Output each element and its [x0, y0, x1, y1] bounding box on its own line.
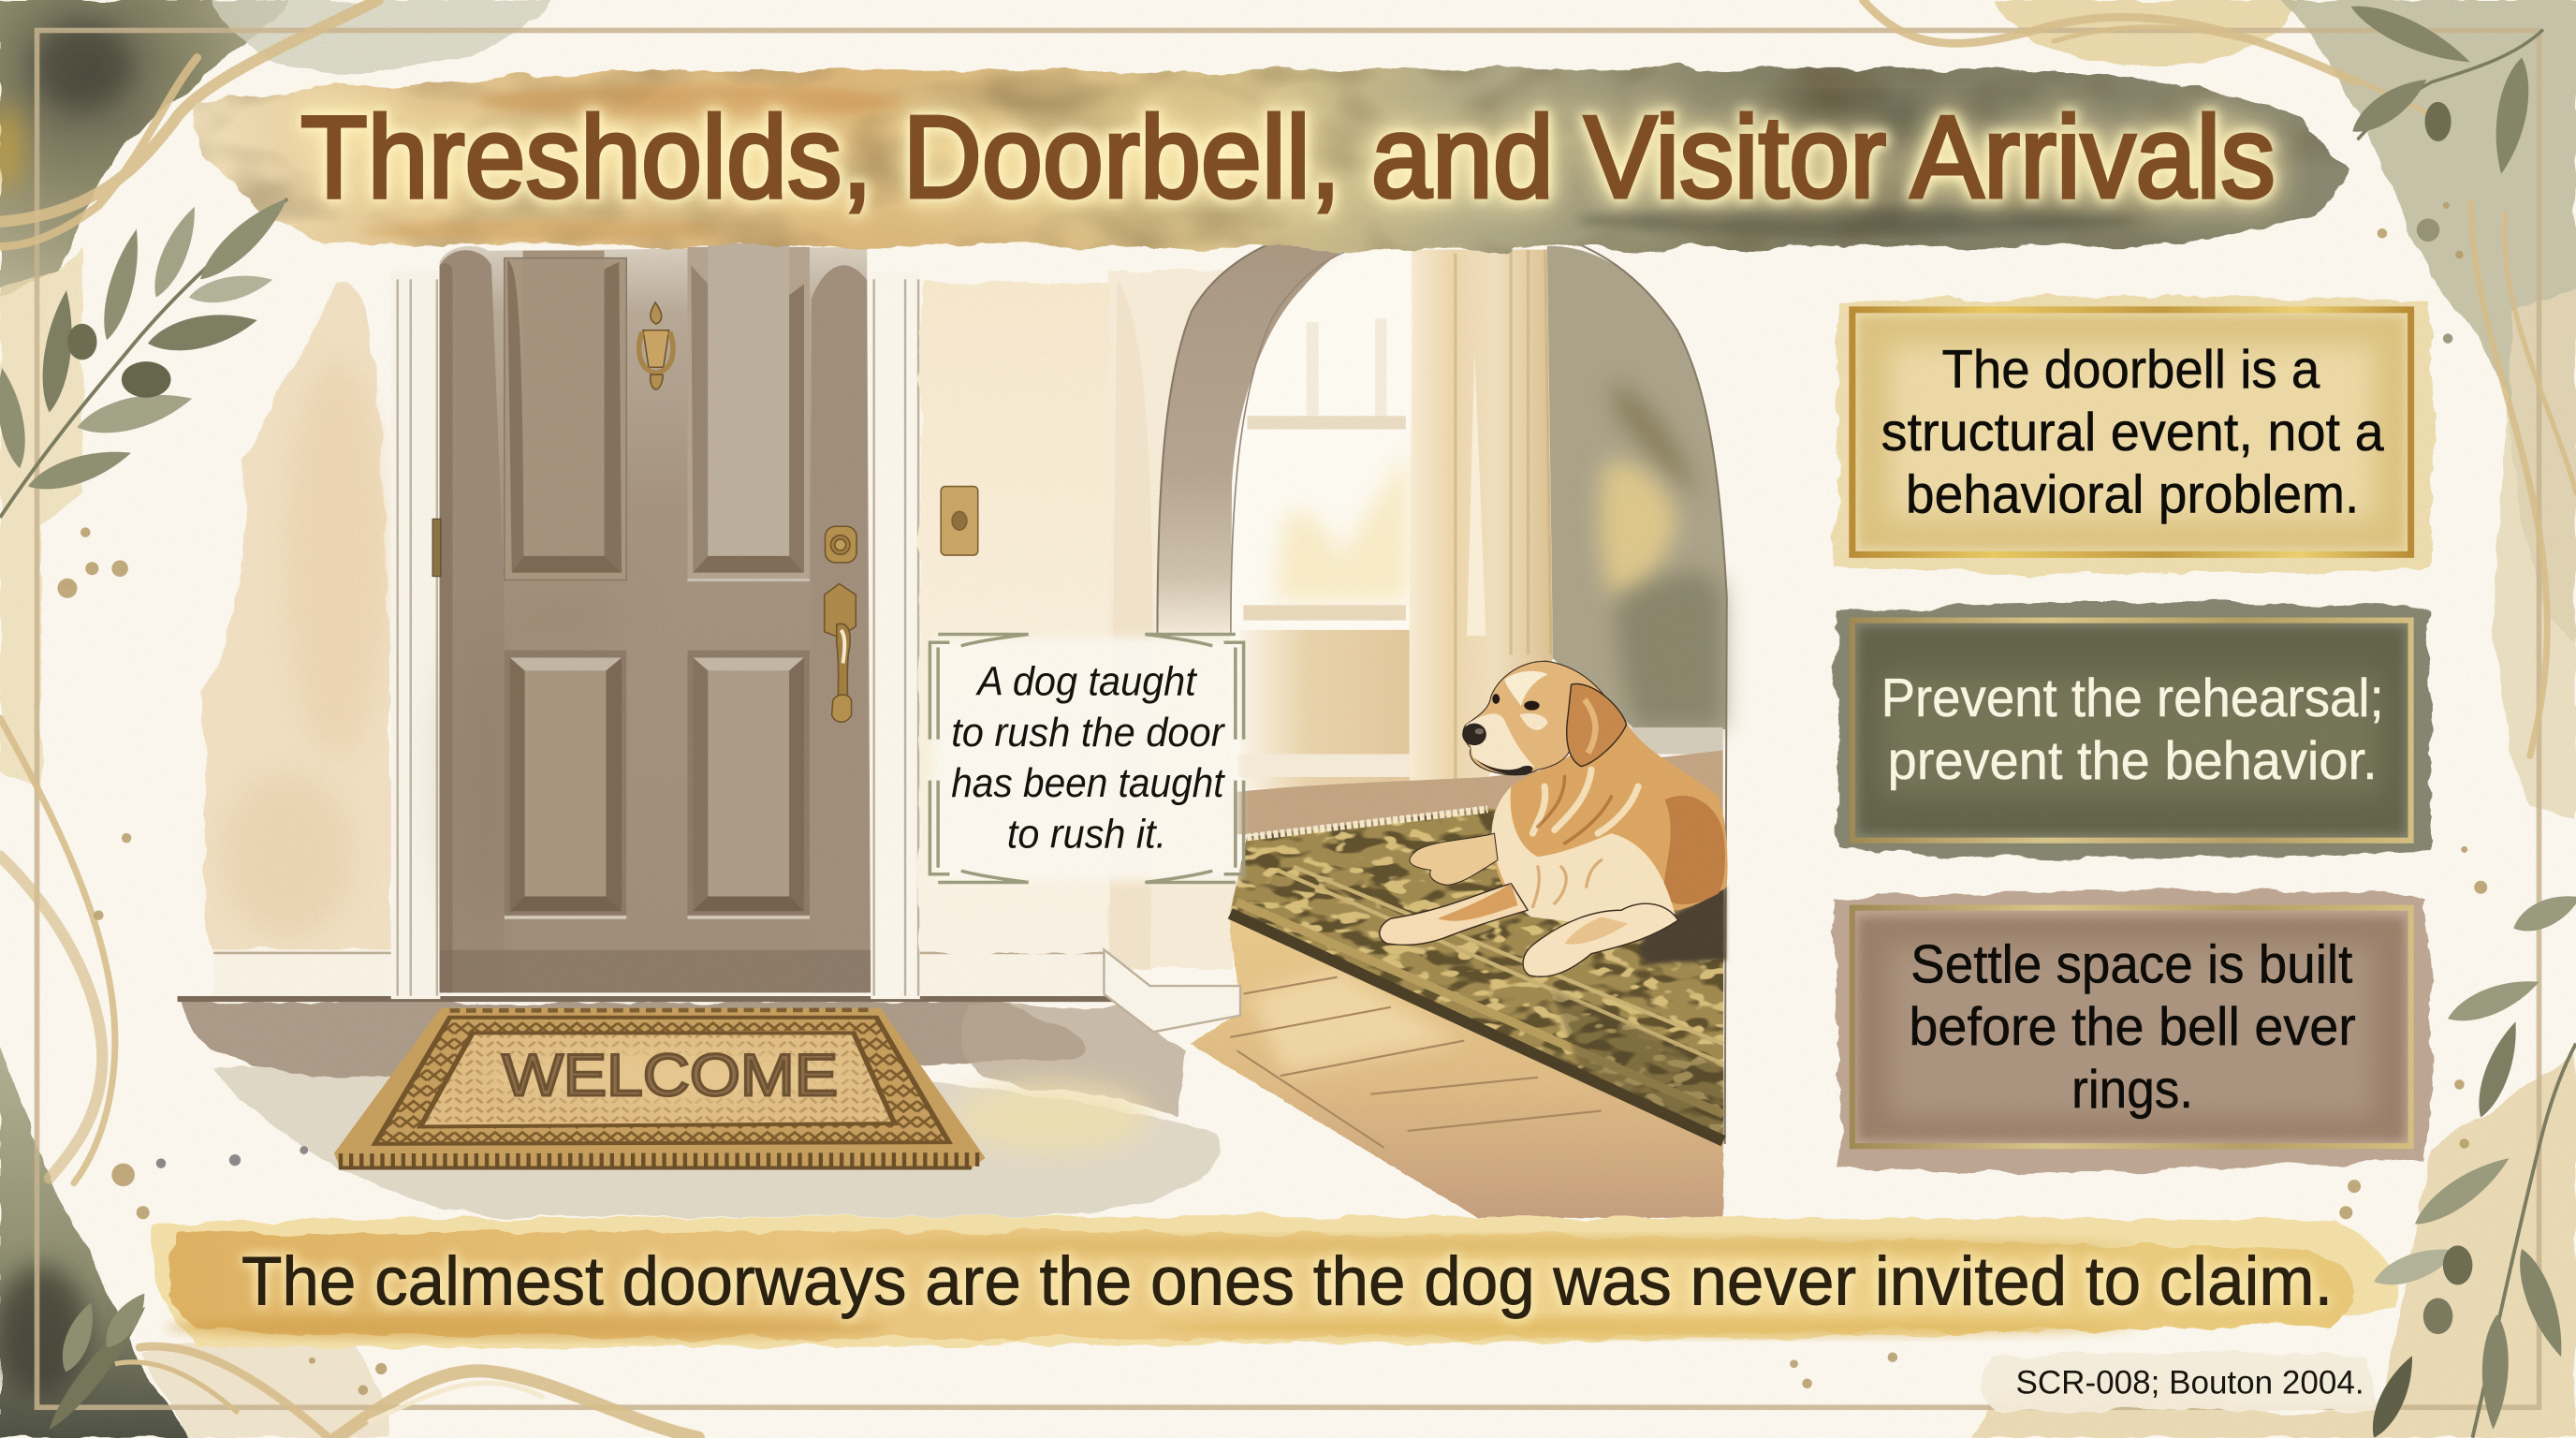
takeaway text: The calmest doorways are the ones the dog was never invited to claim.: [242, 1242, 2333, 1320]
window opening: [1230, 250, 1410, 788]
door panel lower left: [505, 651, 626, 917]
welcome mat: [334, 1008, 986, 1169]
door handle: [825, 583, 856, 722]
olive branch: lower left: [41, 1287, 238, 1436]
arch and back room: [1157, 230, 1727, 1144]
source note: SCR-008; Bouton 2004.: [2016, 1364, 2364, 1401]
quote box: [929, 634, 1244, 882]
card: doorbell: structural event, not a: [1881, 403, 2384, 462]
olive branch: lower right: [2364, 886, 2576, 1438]
title: Thresholds, Doorbell, and Visitor Arrivals: [300, 93, 2276, 223]
dog front leg right: [1523, 903, 1678, 976]
door panel upper left: [505, 251, 626, 580]
arch left band: [1157, 230, 1379, 636]
card: rehearsal: [1837, 603, 2433, 858]
door frame: [391, 271, 440, 999]
card: settle space: before the bell ever: [1909, 997, 2356, 1057]
baseboards: [213, 949, 391, 999]
title banner wash: [194, 68, 2349, 249]
floor wash: [213, 1060, 1222, 1216]
deadbolt: [825, 526, 856, 563]
card: rehearsal: prevent the behavior.: [1888, 731, 2378, 791]
dog head: [1462, 661, 1627, 775]
quote text: [951, 658, 1226, 858]
card: settle space: rings.: [2071, 1060, 2193, 1120]
dog front leg left: [1380, 884, 1528, 945]
rug: [1230, 808, 1726, 1141]
quote text: to rush it.: [1007, 812, 1166, 858]
olive branch: upper left: [0, 189, 296, 518]
rug and floor: [1190, 661, 1728, 1218]
dog ear: [1567, 684, 1627, 767]
source note: [1983, 1352, 2378, 1410]
wood floor: [1190, 914, 1723, 1218]
quote corner brackets: [929, 634, 1244, 882]
door panel lower right: [687, 651, 810, 917]
card: rehearsal: Prevent the rehearsal;: [1881, 668, 2384, 728]
doorbell: [941, 487, 978, 555]
quote text: has been taught: [951, 760, 1225, 806]
dog: [1380, 661, 1728, 976]
corner pillar: [1109, 271, 1236, 970]
right wall: [1547, 246, 1727, 729]
card: doorbell: [1837, 296, 2433, 573]
floor behind rug: [1234, 750, 1723, 834]
pillar base: [1104, 949, 1240, 1032]
dog mane: [1492, 786, 1675, 924]
quote text: to rush the door: [951, 710, 1226, 756]
door panel upper right: [687, 243, 810, 580]
card: settle space: [1837, 890, 2432, 1172]
right of door wall: [920, 283, 1117, 953]
bottom takeaway banner: [150, 1216, 2398, 1347]
welcome lettering: WELCOME: [502, 1041, 838, 1108]
scene: doorway illustration: [178, 230, 1728, 1218]
curtain: [1409, 250, 1553, 781]
door: [432, 243, 978, 992]
left wall wash: [200, 282, 391, 949]
card: doorbell: The doorbell is a: [1942, 340, 2320, 400]
quote text: A dog taught: [974, 658, 1197, 704]
dog rear paw: [1410, 833, 1498, 885]
card: settle space: Settle space is built: [1910, 935, 2352, 995]
card: doorbell: behavioral problem.: [1906, 465, 2359, 525]
door hinge: [432, 519, 441, 577]
dog body: [1492, 723, 1728, 910]
door knocker: [639, 302, 673, 389]
olive branch: upper right: [2345, 0, 2543, 177]
paint splatters: [57, 202, 2487, 1395]
